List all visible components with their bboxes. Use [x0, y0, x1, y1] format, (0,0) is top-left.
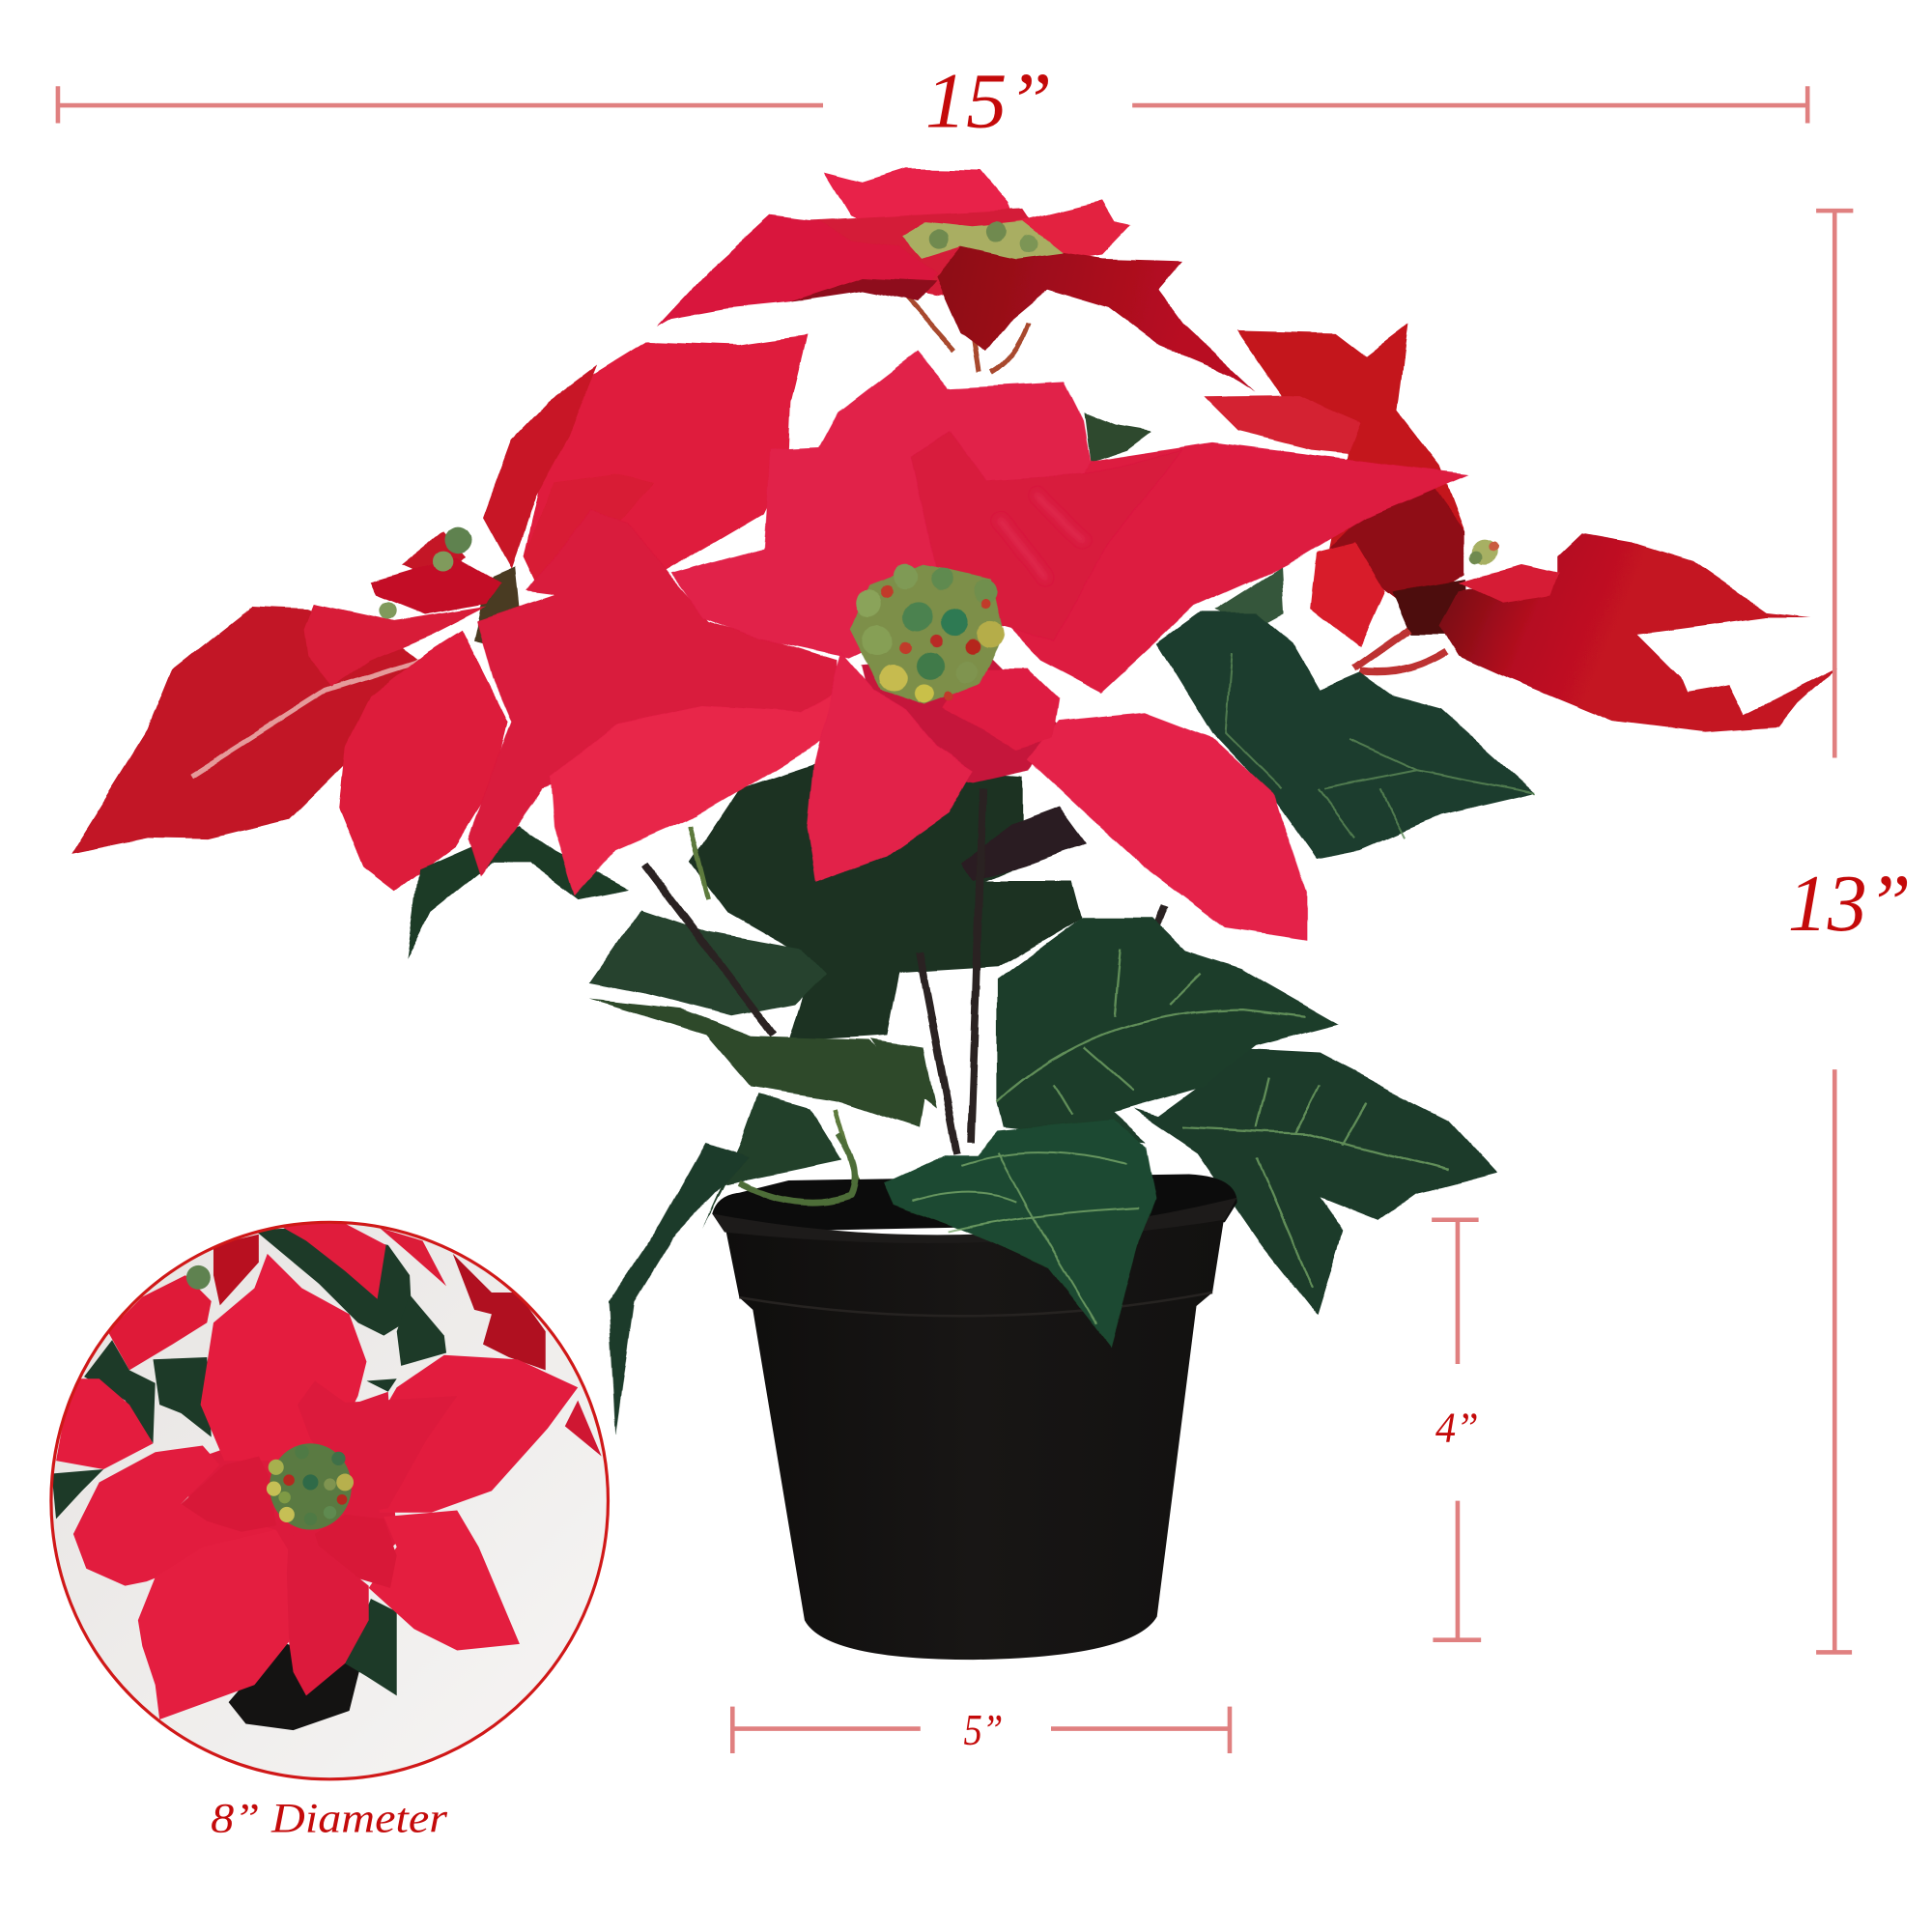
- small olive leaf behind: [1084, 412, 1152, 462]
- inset red underlay: [187, 1391, 396, 1550]
- inset stamens: [267, 1443, 354, 1530]
- pot-front leaf: [884, 1120, 1155, 1347]
- label: 4 inch: 4”: [1435, 1403, 1479, 1451]
- top flower stamens: [902, 222, 1062, 259]
- label: 13 inch: 13”: [1788, 859, 1911, 949]
- dimension: 5 inch pot width: [732, 1705, 1230, 1754]
- lower-left leaf under left flower: [407, 826, 629, 961]
- plant: [71, 169, 1837, 1660]
- label: 5 inch: 5”: [963, 1705, 1003, 1754]
- top flower: [657, 169, 1257, 392]
- hanging leaf left of pot: [609, 1142, 751, 1435]
- right flower back petals: [1203, 324, 1837, 732]
- underlay behind lower petals: [863, 653, 1060, 782]
- inset: top view of flower in circle: [49, 1221, 611, 1781]
- right flower stamens: [1470, 540, 1498, 564]
- left flower stamens: [380, 526, 472, 620]
- dimension: 4 inch pot height: [1432, 1220, 1481, 1640]
- upper-right foliage leaf: [1157, 567, 1535, 859]
- central flower: [469, 352, 1468, 940]
- dimension: 15 inch width: [58, 56, 1807, 144]
- left flower: [71, 335, 807, 891]
- large right foliage leaves: [997, 918, 1498, 1316]
- central stamens: [850, 564, 1005, 705]
- stems: [644, 788, 1164, 1153]
- pot: [712, 1175, 1237, 1660]
- inset caption: 8” Diameter: [211, 1796, 447, 1842]
- dimension: 13 inch height: [1788, 211, 1911, 1652]
- label: 15 inch: 15”: [925, 56, 1052, 144]
- central foliage: [589, 764, 1164, 1229]
